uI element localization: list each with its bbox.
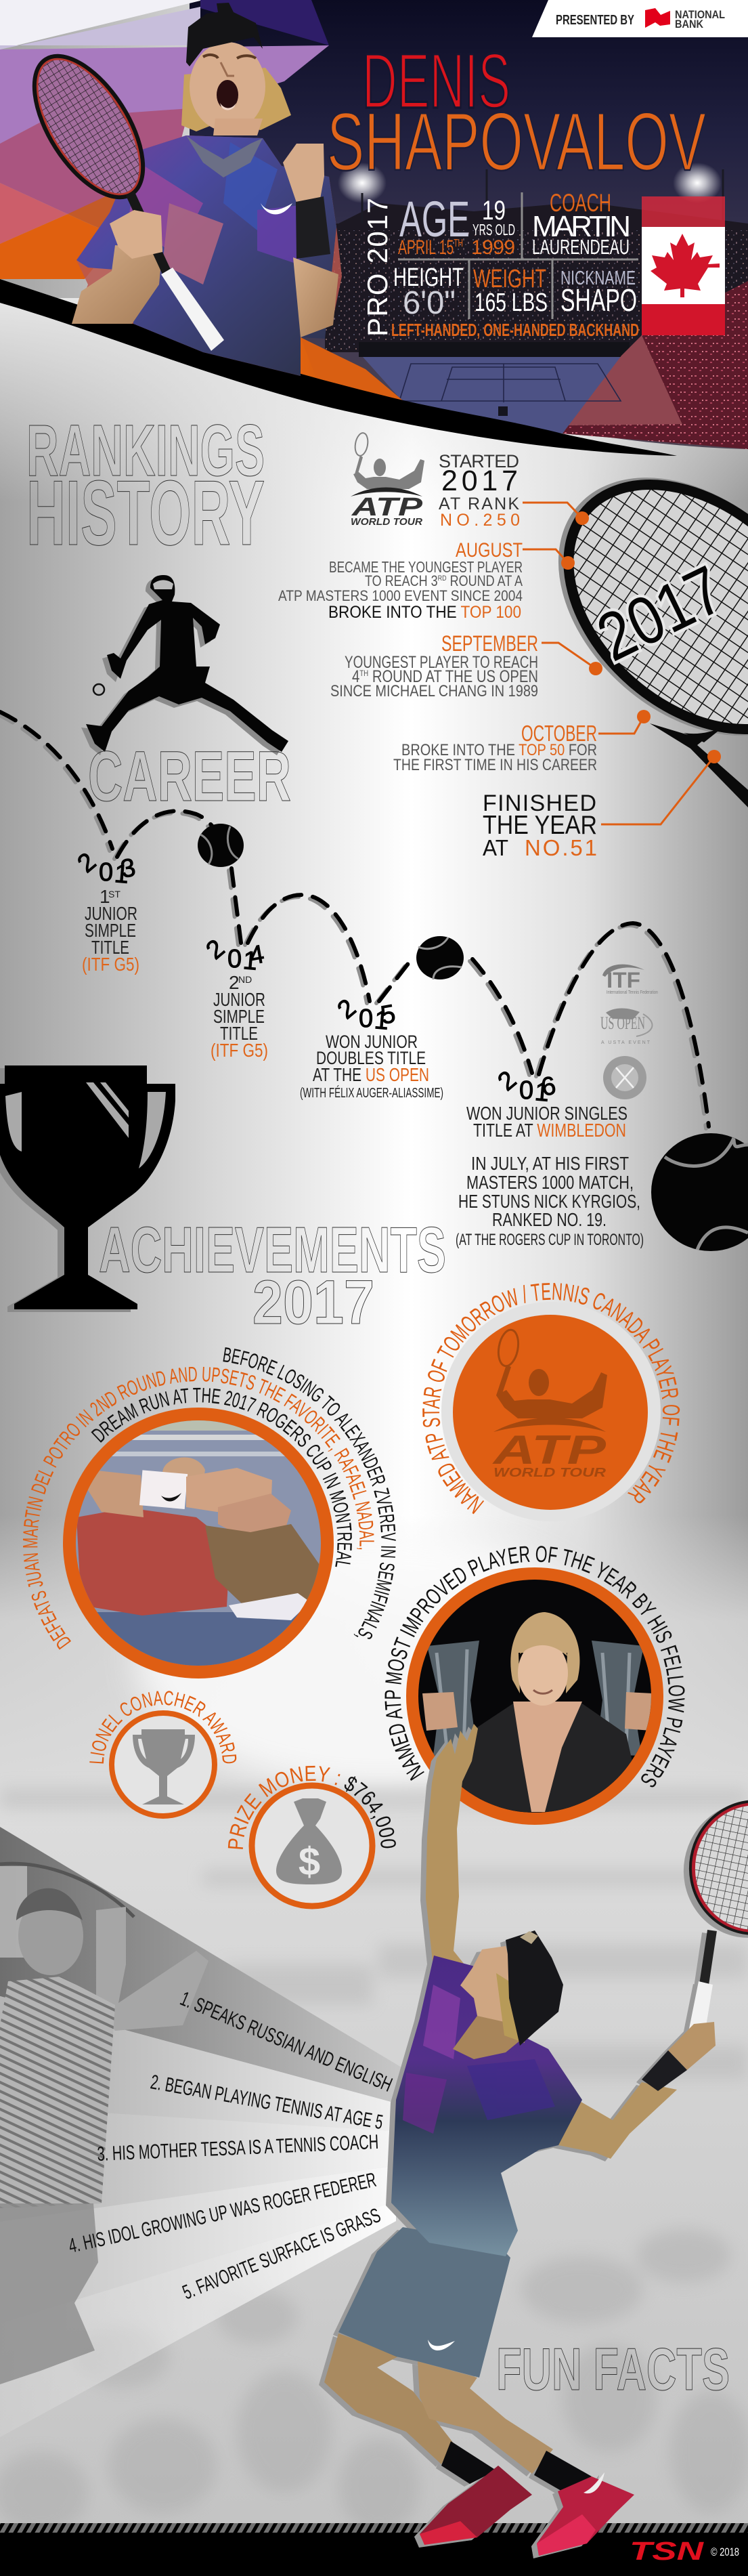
black trophy [0, 1065, 175, 1312]
right forearm and hand [558, 2082, 677, 2159]
nike logo [428, 2340, 455, 2350]
birth date: APRIL 15 [398, 236, 484, 259]
wristband [642, 2050, 687, 2091]
dream run photo circle [23, 1347, 396, 1678]
shorts [338, 2227, 510, 2378]
federer striped shirt [0, 1977, 115, 2208]
racket [680, 1791, 748, 2055]
september note: SINCE MICHAEL CHANG IN 1989 [330, 682, 538, 700]
handedness: LEFT-HANDED, ONE-HANDED BACKHAND [391, 320, 639, 340]
august note: BECAME THE YOUNGEST PLAYER [329, 558, 523, 576]
started 2017 text: STARTED [439, 451, 519, 471]
birth date: 1999 [471, 236, 515, 259]
body and shirt shadow [72, 135, 342, 376]
legs [324, 2334, 454, 2464]
started 2017 text: AT RANK [439, 494, 519, 513]
october note: OCTOBER [521, 721, 597, 746]
left shoe [420, 2466, 532, 2543]
birth date: TH [454, 238, 463, 249]
canadian flag [642, 196, 725, 335]
hand gripping racket [110, 210, 162, 259]
curved caption: LIONEL CONACHER AWARD [89, 1691, 237, 1764]
kyrgios match note: HE STUNS NICK KYRGIOS, [458, 1191, 640, 1212]
bottom footer bar [0, 2523, 748, 2576]
started 2017 text: NO.250 [440, 511, 520, 530]
nickname [560, 268, 637, 318]
stadium night sky [190, 0, 748, 449]
age value: 19 [482, 196, 506, 226]
achievements heading: ACHIEVEMENTS [99, 1214, 446, 1286]
height [393, 263, 464, 321]
us open logo: A USTA EVENT [601, 1040, 651, 1045]
wristband [296, 196, 330, 259]
atp logo orange [491, 1328, 607, 1479]
shirt [391, 1956, 582, 2256]
2014 title text: (ITF G5) [211, 1040, 268, 1061]
nickname: SHAPO [560, 282, 637, 318]
coach [532, 189, 631, 259]
october note [393, 721, 597, 774]
2016 title text: WON JUNIOR SINGLES [466, 1103, 628, 1124]
2015 title text: (WITH FÉLIX AUGER-ALIASSIME) [300, 1085, 443, 1101]
national bank wordmark [675, 8, 725, 30]
curved caption lines: BEFORE LOSING TO ALEXANDER ZVEREV IN SEMIFINALS, [223, 1347, 396, 1639]
federer head [18, 1897, 83, 1975]
curved caption lines: DEFEATS JUAN MARTIN DEL POTRO IN 2ND ROUND AND UPSETS THE FAVORITE, RAFAEL NADAL, [23, 1367, 374, 1650]
national bank wordmark: NATIONAL [675, 8, 725, 21]
serving player [324, 1724, 748, 2556]
sponsor tab [532, 0, 748, 37]
coach: LAURENDEAU [532, 235, 630, 259]
left geometric polygons [0, 0, 403, 401]
federer racket [0, 1863, 134, 1917]
fun fact 4: 4. HIS IDOL GROWING UP WAS ROGER FEDERER [66, 2169, 378, 2258]
2015 title text [300, 1032, 443, 1101]
2015 title text: AT THE US OPEN [313, 1064, 429, 1085]
trophy handle gaps [5, 1092, 166, 1168]
atp logo orange: WORLD TOUR [493, 1466, 606, 1479]
bouncing ball dashed trajectory [0, 712, 709, 1128]
face [460, 1946, 518, 2022]
year 2013: 2013 [72, 847, 137, 889]
player stat block [361, 189, 639, 340]
curved caption lines: DREAM RUN AT THE 2017 ROGERS CUP IN MONTREAL [91, 1387, 352, 1567]
year 2015: 2015 [332, 994, 397, 1036]
stadium lights [338, 163, 723, 224]
august note: BROKE INTO THE TOP 100 [328, 603, 521, 622]
achievements heading [99, 1214, 446, 1337]
presented by text: PRESENTED BY [556, 13, 634, 28]
september note: ROUND AT THE US OPEN [368, 667, 538, 686]
coach: COACH [550, 189, 611, 217]
august note: RD [438, 574, 447, 583]
dollar sign: $ [299, 1840, 320, 1884]
tennis court [363, 281, 748, 449]
curved caption: PRIZE MONEY : $764,000 [227, 1765, 396, 1849]
weight: WEIGHT [473, 265, 546, 293]
height: HEIGHT [393, 263, 464, 292]
august note: AUGUST [456, 539, 523, 562]
2014 title text: JUNIOR [213, 989, 265, 1010]
year 2016 [466, 1065, 628, 1141]
kyrgios match note: RANKED NO. 19. [492, 1209, 607, 1230]
lying player photo [76, 1420, 321, 1666]
fun fact 5: 5. FAVORITE SURFACE IS GRASS [179, 2204, 384, 2304]
started 2017 text [439, 451, 520, 530]
coach: MARTIN [532, 210, 631, 243]
achievements heading: 2017 [252, 1268, 374, 1337]
neck [453, 1998, 525, 2059]
atp world tour logo [351, 432, 424, 528]
fun facts ray fan [0, 1827, 401, 2437]
2013 title text: (ITF G5) [82, 954, 139, 975]
trophy icon [133, 1729, 195, 1804]
weight: 165 LBS [475, 289, 548, 317]
forearm [72, 245, 162, 324]
stadium crowd [325, 202, 748, 357]
backwards cap [186, 3, 263, 66]
2014 title text [211, 972, 268, 1061]
kyrgios match note: (AT THE ROGERS CUP IN TORONTO) [456, 1231, 644, 1249]
2013 title text: TITLE [91, 937, 129, 958]
socks [441, 2441, 592, 2495]
2013 title text: JUNIOR [85, 903, 137, 924]
national bank wordmark: BANK [675, 18, 704, 30]
finished the year note [483, 790, 597, 860]
tsn logo: TSN [630, 2537, 705, 2566]
kyrgios match note [456, 1153, 644, 1249]
us open logo [600, 1008, 652, 1045]
finished the year note: NO.51 [525, 835, 597, 860]
curved caption: NAMED ATP MOST IMPROVED PLAYER OF THE YEAR BY HIS FELLOW PLAYERS [384, 1546, 685, 1787]
september note: TH [359, 669, 368, 678]
fun fact 3: 3. HIS MOTHER TESSA IS A TENNIS COACH [97, 2131, 379, 2166]
year 2013 [72, 847, 139, 975]
finished the year note: THE YEAR [483, 811, 597, 840]
august note: ROUND AT A [447, 572, 523, 589]
itf logo: International Tennis Federation [607, 990, 658, 995]
face [190, 42, 265, 131]
first name: DENIS [362, 38, 510, 125]
itf logo [602, 965, 658, 995]
2014 title text: ND [238, 974, 252, 985]
raised arm [426, 1724, 478, 1968]
small ball [93, 684, 104, 695]
cap [506, 1930, 563, 2046]
nike swoosh [261, 203, 292, 214]
2015 title text: WON JUNIOR [326, 1032, 418, 1052]
rankings history heading: RANKINGS [26, 409, 265, 491]
2013 title text: ST [108, 889, 120, 900]
2016 title text [466, 1103, 628, 1141]
racket neck and handle [650, 723, 748, 807]
name title [327, 38, 706, 188]
atp world tour logo: ATP [351, 493, 423, 522]
portrait photo [422, 1612, 653, 1813]
september note: YOUNGEST PLAYER TO REACH [345, 653, 538, 672]
finished the year note: AT [483, 835, 508, 860]
prize money badge [227, 1765, 396, 1909]
national bank flag logo [645, 8, 670, 28]
october note: BROKE INTO THE TOP 50 FOR [401, 741, 597, 759]
copyright: © 2018 [711, 2546, 739, 2558]
2013 title text: SIMPLE [85, 920, 136, 941]
hair [496, 1973, 525, 2043]
federer background figure [0, 1863, 208, 2384]
september note [330, 631, 538, 700]
september note: SEPTEMBER [441, 631, 538, 656]
2016 title text: TITLE AT WIMBLEDON [473, 1120, 626, 1141]
ball 2 [416, 936, 464, 979]
height: 6'0" [403, 285, 456, 321]
kyrgios match note: IN JULY, AT HIS FIRST [471, 1153, 629, 1174]
age value [472, 196, 515, 238]
timeline leader lines and dots [523, 503, 721, 824]
october note: THE FIRST TIME IN HIS CAREER [393, 756, 597, 774]
shirt [76, 135, 336, 376]
federer legs [0, 2203, 98, 2384]
wimbledon logo [603, 1056, 646, 1099]
big ball [651, 1133, 748, 1251]
september note: 4 [352, 667, 361, 686]
most improved player photo circle [384, 1546, 685, 1825]
fun fact 2: 2. BEGAN PLAYING TENNIS AT AGE 5 [149, 2071, 384, 2134]
player one celebrating with racket [13, 3, 342, 376]
ball 1 [198, 824, 244, 867]
started 2017 text: 2017 [441, 465, 518, 497]
pro since label: PRO 2017 [361, 198, 393, 337]
open mouth [217, 80, 238, 110]
nickname: NICKNAME [560, 268, 636, 289]
black curved swoosh [0, 279, 677, 456]
atp star of tomorrow badge [422, 1283, 680, 1519]
lionel conacher award badge [89, 1691, 237, 1819]
hair [181, 68, 291, 131]
2013 title text [82, 886, 139, 975]
curved caption: NAMED ATP STAR OF TOMORROW / TENNIS CANADA PLAYER OF THE YEAR [422, 1283, 680, 1515]
tsn logo [630, 2537, 739, 2566]
2014 title text: 2 [229, 972, 240, 993]
tennis player silhouette [81, 575, 288, 755]
rankings history heading [26, 409, 265, 564]
2014 title text: TITLE [220, 1023, 258, 1044]
finished the year note: FINISHED [483, 790, 596, 816]
2014 title text: SIMPLE [213, 1006, 265, 1027]
year 2016: 2016 [493, 1065, 558, 1107]
2015 title text: DOUBLES TITLE [316, 1048, 426, 1068]
fun fact 1: 1. SPEAKS RUSSIAN AND ENGLISH [177, 1987, 395, 2096]
large racket with 2017 [558, 478, 748, 807]
itf logo: ITF [607, 968, 640, 992]
right arm with fist [293, 257, 338, 337]
august note: TO REACH 3 [365, 572, 454, 589]
age value: YRS OLD [472, 221, 515, 238]
rankings history heading: HISTORY [26, 461, 265, 564]
august note [278, 539, 523, 622]
us open logo: US OPEN [600, 1013, 645, 1033]
atp world tour logo: WORLD TOUR [351, 516, 422, 528]
right shoe [537, 2476, 634, 2556]
raised racket [13, 38, 224, 351]
2013 title text: 1 [100, 886, 110, 907]
age: AGE [399, 191, 470, 247]
header panel with stadium [0, 0, 748, 456]
year 2015 [300, 994, 443, 1101]
maple leaf [651, 234, 720, 297]
federer arms [96, 1907, 208, 2031]
atp logo orange: ATP [491, 1427, 607, 1473]
career heading: CAREER [88, 737, 291, 816]
year 2014 [201, 934, 268, 1061]
kyrgios match note: MASTERS 1000 MATCH, [466, 1172, 634, 1193]
trophy highlight [86, 1082, 129, 1138]
money bag icon [276, 1798, 342, 1884]
weight [473, 265, 548, 317]
year 2014: 2014 [201, 934, 266, 976]
august note: ATP MASTERS 1000 EVENT SINCE 2004 [278, 587, 523, 604]
